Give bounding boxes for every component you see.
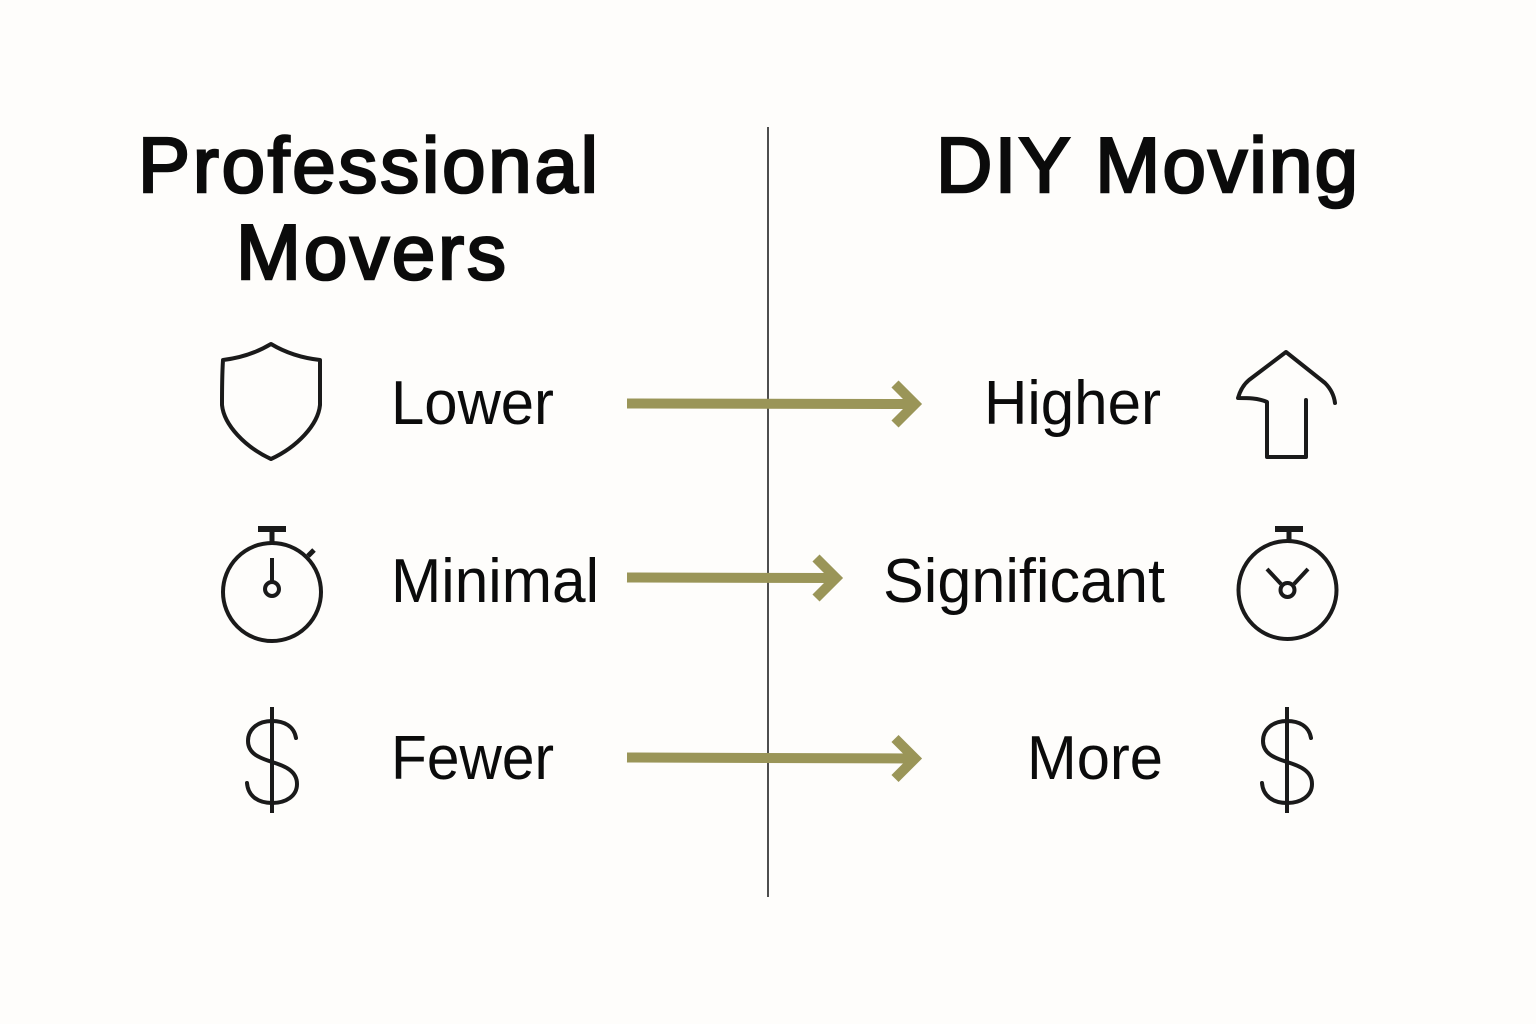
icon: dollar sign, left (247, 707, 297, 813)
heading: Professional Movers (138, 121, 598, 296)
icon: stopwatch, left (223, 529, 321, 641)
heading: Professional Movers: Movers (236, 208, 506, 296)
label: Fewer: Fewer (391, 724, 554, 793)
arrow: Lower to Higher (627, 384, 915, 424)
heading: DIY Moving: DIY Moving (936, 121, 1358, 209)
icon: stopwatch, right (1238, 529, 1336, 639)
label: Higher: Higher (984, 369, 1161, 438)
arrow: Fewer to More (627, 738, 915, 778)
icon: shield (222, 344, 320, 459)
icon: up arrow house (1238, 352, 1335, 457)
heading: Professional Movers: Professional (138, 121, 598, 209)
icon: dollar sign, right (1262, 707, 1312, 813)
label: Minimal: Minimal (391, 547, 599, 616)
label: Significant: Significant (883, 547, 1165, 616)
label: More: More (1027, 724, 1163, 793)
arrow: Minimal to Significant (627, 558, 836, 598)
center divider (767, 127, 769, 897)
label: Lower: Lower (391, 369, 554, 438)
